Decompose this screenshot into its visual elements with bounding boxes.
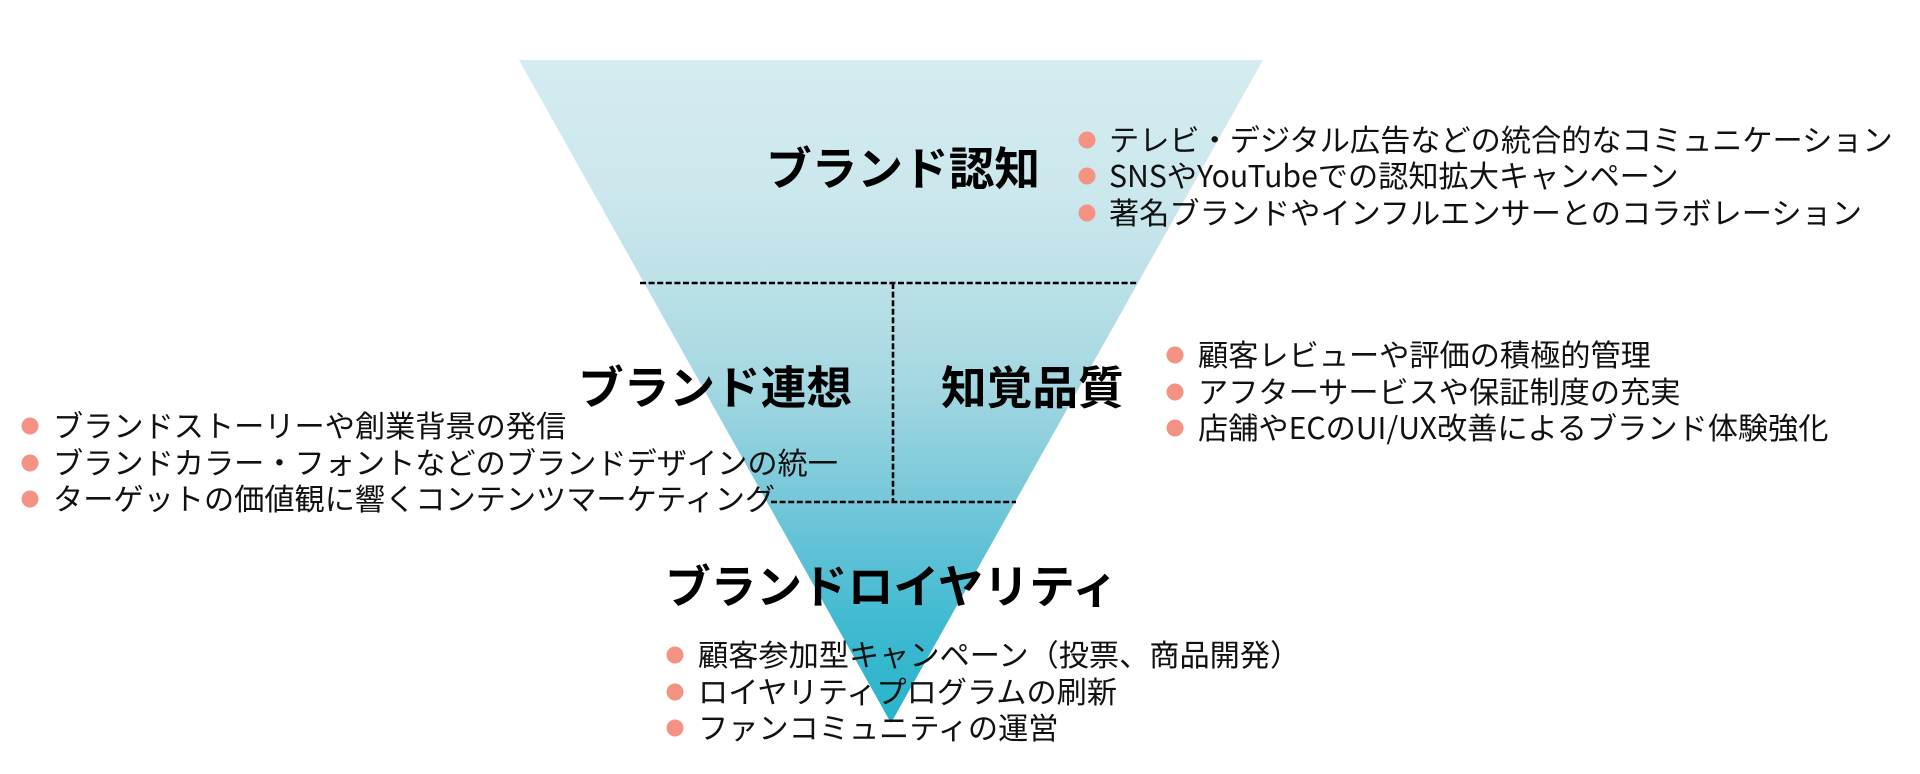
- bullet list: ブランドロイヤリティ: ロイヤリティプログラムの刷新: [698, 668, 1117, 712]
- bullet list: 知覚品質: [1166, 331, 1828, 448]
- bullet list: ブランド連想: ターゲットの価値観に響くコンテンツマーケティング: [53, 475, 775, 519]
- bullet list: ブランドロイヤリティ: ファンコミュニティの運営: [698, 704, 1058, 748]
- inverted funnel triangle: [519, 60, 1263, 723]
- bullet list: ブランド連想: [22, 402, 838, 519]
- bullet list: ブランドロイヤリティ: 顧客参加型キャンペーン（投票、商品開発）: [698, 631, 1300, 675]
- bullet list: ブランド認知: テレビ・デジタル広告などの統合的なコミュニケーション: [1109, 116, 1893, 160]
- bullet list: ブランド連想: ブランドストーリーや創業背景の発信: [53, 402, 566, 446]
- heading: 知覚品質: 知覚品質: [941, 352, 1124, 418]
- dashed dividers: [640, 283, 1137, 502]
- bullet list: 知覚品質: 顧客レビューや評価の積極的管理: [1198, 331, 1651, 375]
- bullet list: ブランド認知: 著名ブランドやインフルエンサーとのコラボレーション: [1109, 189, 1862, 233]
- heading: ブランドロイヤリティ: ブランドロイヤリティ: [665, 551, 1118, 617]
- bullet list: ブランド認知: SNSやYouTubeでの認知拡大キャンペーン: [1109, 152, 1679, 196]
- bullet list: ブランド認知: [1078, 116, 1893, 233]
- bullet list: 知覚品質: アフターサービスや保証制度の充実: [1198, 368, 1680, 412]
- bullet list: ブランドロイヤリティ: [666, 631, 1300, 748]
- bullet list: 知覚品質: 店舗やECのUI/UX改善によるブランド体験強化: [1198, 404, 1828, 448]
- bullet list: ブランド連想: ブランドカラー・フォントなどのブランドデザインの統一: [53, 439, 838, 483]
- heading: ブランド連想: ブランド連想: [578, 352, 852, 418]
- heading: ブランド認知: ブランド認知: [766, 133, 1040, 199]
